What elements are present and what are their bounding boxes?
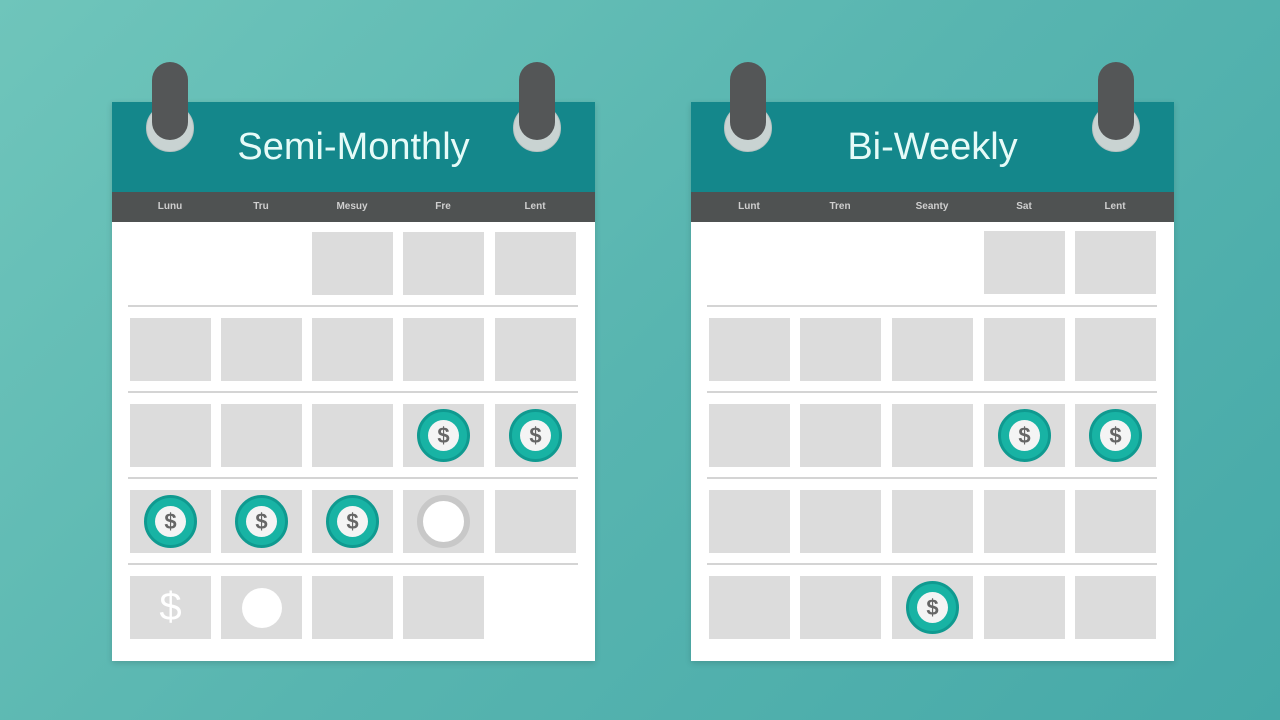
heading: Bi-Weekly [691, 102, 1174, 192]
weekday header row: Lunt [738, 201, 760, 212]
weekday header row [691, 192, 1174, 222]
binder ring left [724, 62, 772, 152]
icon: pay coin [312, 490, 393, 553]
icon: pay coin [403, 404, 484, 467]
weekday header row: Tren [829, 201, 851, 212]
binder ring right [513, 62, 561, 152]
icon: pay coin: $ [437, 423, 450, 448]
weekday header row: Tru [253, 201, 269, 212]
icon: pay coin [495, 404, 576, 467]
icon: faded dollar [130, 576, 211, 639]
icon: pay coin [221, 490, 302, 553]
icon: pay coin [1075, 404, 1156, 467]
icon: empty coin [403, 490, 484, 553]
heading: Semi-Monthly: Semi-Monthly [237, 126, 470, 168]
icon: pay coin [130, 490, 211, 553]
panel: bi-weekly calendar [691, 102, 1174, 661]
icon: pay coin: $ [255, 509, 268, 534]
weekday header row [112, 192, 595, 222]
binder ring left [146, 62, 194, 152]
icon: pay coin: $ [926, 595, 939, 620]
icon: white dot [221, 576, 302, 639]
heading: Bi-Weekly: Bi-Weekly [847, 126, 1018, 168]
icon: pay coin [984, 404, 1065, 467]
icon: pay coin: $ [346, 509, 359, 534]
binder ring right [1092, 62, 1140, 152]
icon: pay coin [892, 576, 973, 639]
icon: pay coin: $ [529, 423, 542, 448]
icon: pay coin: $ [1109, 423, 1122, 448]
weekday header row: Fre [435, 201, 451, 212]
icon: faded dollar: $ [159, 585, 182, 629]
weekday header row: Lent [1104, 201, 1126, 212]
panel: semi-monthly calendar [112, 102, 595, 661]
weekday header row: Mesuy [336, 201, 368, 212]
heading: Semi-Monthly [112, 102, 595, 192]
weekday header row: Lent [524, 201, 546, 212]
weekday header row: Sat [1016, 201, 1032, 212]
icon: pay coin: $ [1018, 423, 1031, 448]
icon: pay coin: $ [164, 509, 177, 534]
weekday header row: Lunu [158, 201, 182, 212]
weekday header row: Seanty [916, 201, 948, 212]
